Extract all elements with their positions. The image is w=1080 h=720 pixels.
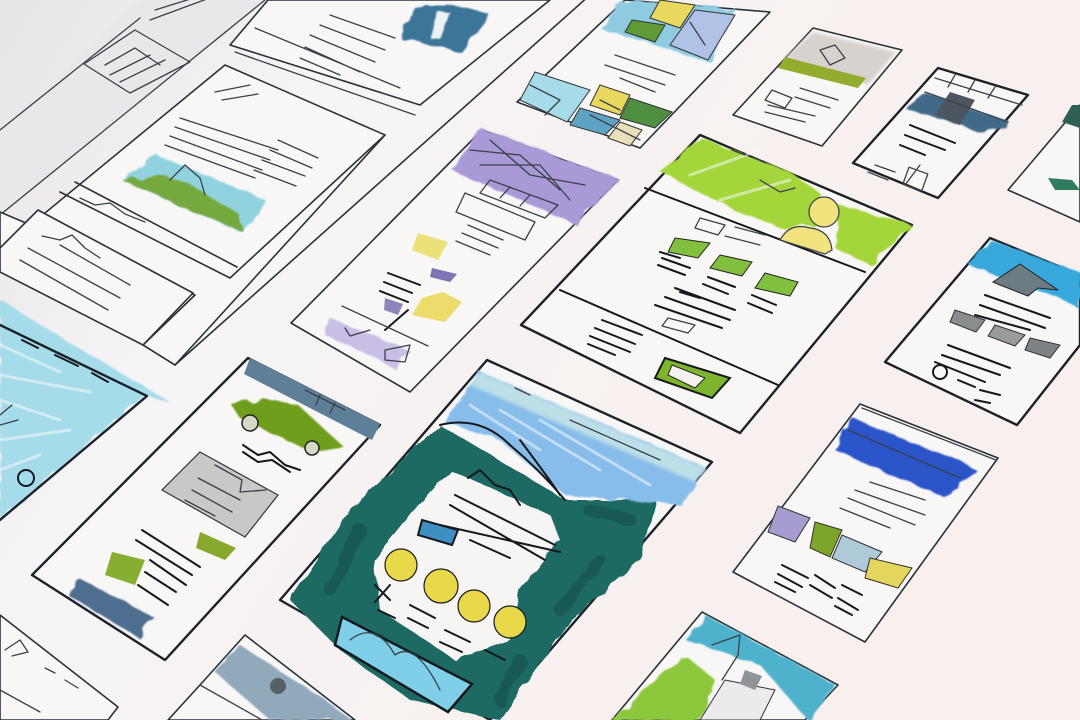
- sketch: green landing page: [521, 135, 912, 433]
- content card: [375, 470, 560, 660]
- sheet: top-left long page: [0, 0, 265, 215]
- sketch: bottom-left page: [0, 615, 118, 720]
- yellow blocks: [384, 233, 462, 322]
- sheet: top-right sketch with green band: [733, 28, 902, 146]
- sketch: right blue house: [885, 238, 1080, 425]
- footer bar: [68, 577, 155, 637]
- sheet: colourful top sketch: [517, 0, 770, 148]
- sky: [444, 372, 706, 505]
- avatar: [780, 197, 839, 254]
- sketch: purple layout: [291, 128, 620, 392]
- hero: green scribble: [660, 137, 822, 228]
- yellow circles: [385, 549, 526, 638]
- green car: [232, 398, 345, 455]
- sheet: top article with volcano: [0, 65, 385, 365]
- sketch: left cyan edge page: [0, 300, 170, 520]
- sheet: top centre page with blue image: [230, 0, 550, 115]
- long sheet edge: [175, 0, 590, 365]
- grey card: [162, 452, 278, 537]
- thumbnail: green car: [655, 358, 730, 398]
- bottom image: [335, 617, 472, 712]
- header bar: [244, 358, 380, 440]
- sketch: right blue page: [733, 404, 998, 642]
- hero colour: volcano: [122, 155, 266, 232]
- sheet: city skyline sketch: [853, 68, 1028, 198]
- text block: small card: [0, 210, 193, 345]
- teal darker marker blotches: [330, 510, 630, 700]
- sketch: dark teal page: [280, 360, 712, 720]
- sketch: bottom-right page: [612, 612, 838, 720]
- sketch: bottom-centre blue page: [168, 635, 355, 720]
- header: purple: [452, 128, 620, 224]
- green cards: [668, 238, 798, 296]
- teal background: [290, 425, 655, 720]
- sheet: far right edge sketch: [1008, 105, 1080, 222]
- sketch: car page: [32, 358, 380, 660]
